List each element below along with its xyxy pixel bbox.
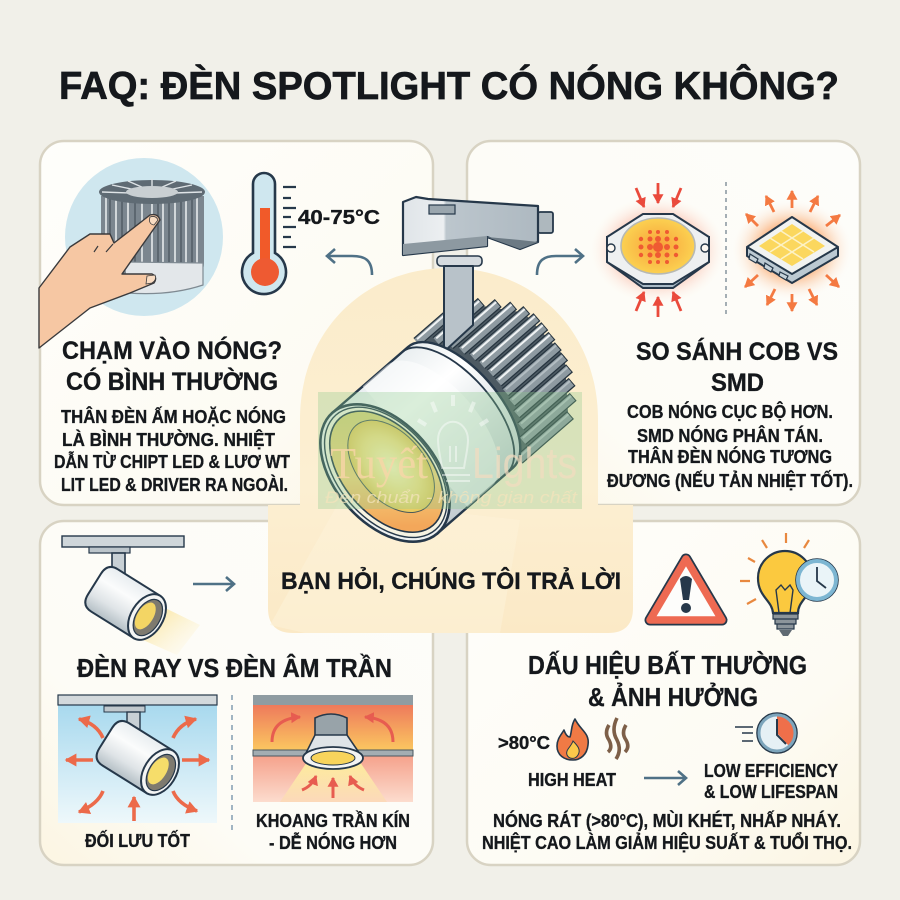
heading: warning signs: DẤU HIỆU BẤT THƯỜNG — [528, 650, 807, 680]
divider: track and recessed — [231, 695, 233, 833]
central backdrop — [268, 268, 633, 633]
heading: touch: CHẠM VÀO NÓNG? — [62, 335, 282, 365]
watermark — [318, 392, 582, 509]
icon: warning triangle — [650, 559, 722, 620]
text block: touch: DẪN TỪ CHIPT LED & LƯƠ WT — [54, 451, 291, 472]
text block: touch — [54, 406, 291, 495]
heading: warning signs — [528, 650, 807, 712]
heat sink fins — [408, 270, 601, 468]
label: enclosed ceiling — [256, 810, 410, 853]
text block: touch: LIT LED & DRIVER RA NGOÀI. — [61, 474, 288, 495]
label: above 80 degrees: >80°C — [498, 733, 550, 753]
text block: COB vs SMD — [607, 401, 853, 491]
panel: track light vs recessed — [40, 521, 433, 865]
heading: track vs recessed: ĐÈN RAY VS ĐÈN ÂM TRẦN — [77, 653, 392, 683]
text block: COB vs SMD: COB NÓNG CỤC BỘ HƠN. — [627, 401, 833, 422]
label: low efficiency and lifespan: & LOW LIFESPAN — [704, 782, 838, 802]
heading: COB vs SMD — [636, 337, 838, 397]
label: enclosed ceiling: KHOANG TRẦN KÍN — [256, 810, 410, 831]
icon: SMD chip — [732, 191, 852, 311]
panel: touching the lamp — [39, 141, 433, 505]
icon: thermometer — [242, 173, 296, 294]
text block: COB vs SMD: ĐƯƠNG (NẾU TẢN NHIỆT TỐT). — [607, 470, 853, 491]
arrow: heat to effects — [644, 777, 686, 779]
diagram: enclosed ceiling — [253, 695, 413, 802]
arrow: to COB panel — [537, 256, 583, 275]
text block: COB vs SMD: SMD NÓNG PHÂN TÁN. — [637, 425, 823, 446]
watermark wordmark: Tuyết — [330, 439, 428, 488]
label: good convection: ĐỐI LƯU TỐT — [85, 830, 191, 851]
heading: touch: CÓ BÌNH THƯỜNG — [66, 366, 278, 396]
watermark bulb logo — [418, 395, 488, 481]
track adapter — [403, 197, 553, 266]
label: enclosed ceiling: - DỄ NÓNG HƠN — [269, 832, 397, 853]
arrow: track light to comparison — [193, 583, 234, 585]
heading: COB vs SMD: SMD — [711, 369, 764, 397]
diagram: good convection — [58, 695, 217, 823]
icon: clock with speed lines — [735, 713, 797, 753]
heading: COB vs SMD: SO SÁNH COB VS — [636, 337, 838, 366]
icon: hand touching heat sink — [39, 158, 223, 348]
temperature range label: 40-75°C — [298, 207, 380, 229]
watermark: Lights — [472, 439, 577, 488]
icon: flame — [557, 719, 588, 760]
icon: smoke — [606, 718, 628, 759]
text block: COB vs SMD: THÂN ĐÈN NÓNG TƯƠNG — [628, 446, 832, 467]
panel: warning signs — [467, 521, 860, 865]
text block: touch: THÂN ĐÈN ẤM HOẶC NÓNG — [61, 406, 286, 427]
icon: light bulb with clock — [740, 533, 838, 636]
light beam — [270, 500, 520, 633]
text block: warning signs: NÓNG RÁT (>80°C), MÙI KHÉT, NHẤP NHÁY. — [493, 810, 841, 831]
icon: COB chip — [590, 183, 726, 317]
arrow: to touch panel — [327, 256, 372, 275]
icon: track light — [62, 536, 200, 655]
text block: warning signs: NHIỆT CAO LÀM GIẢM HIỆU SUẤT & TUỔI THỌ. — [482, 832, 852, 853]
panel: COB vs SMD — [467, 141, 860, 505]
title: FAQ: ĐÈN SPOTLIGHT CÓ NÓNG KHÔNG? — [59, 63, 839, 108]
text block: touch: LÀ BÌNH THƯỜNG. NHIỆT — [62, 429, 276, 450]
stem — [444, 266, 473, 349]
lamp body — [333, 322, 542, 533]
heading: touch — [62, 335, 282, 396]
icon: spotlight — [295, 197, 601, 566]
text block: warning signs — [482, 810, 852, 853]
lens — [295, 380, 475, 566]
watermark tagline: Đèn chuẩn - không gian chất — [325, 488, 578, 507]
label: high heat: HIGH HEAT — [528, 770, 616, 790]
heading: warning signs: & ẢNH HƯỞNG — [588, 681, 758, 712]
label: low efficiency and lifespan: LOW EFFICIENCY — [704, 761, 838, 781]
label: low efficiency and lifespan — [704, 761, 838, 802]
divider: COB and SMD — [725, 182, 727, 317]
central caption: BẠN HỎI, CHÚNG TÔI TRẢ LỜI — [281, 566, 621, 595]
